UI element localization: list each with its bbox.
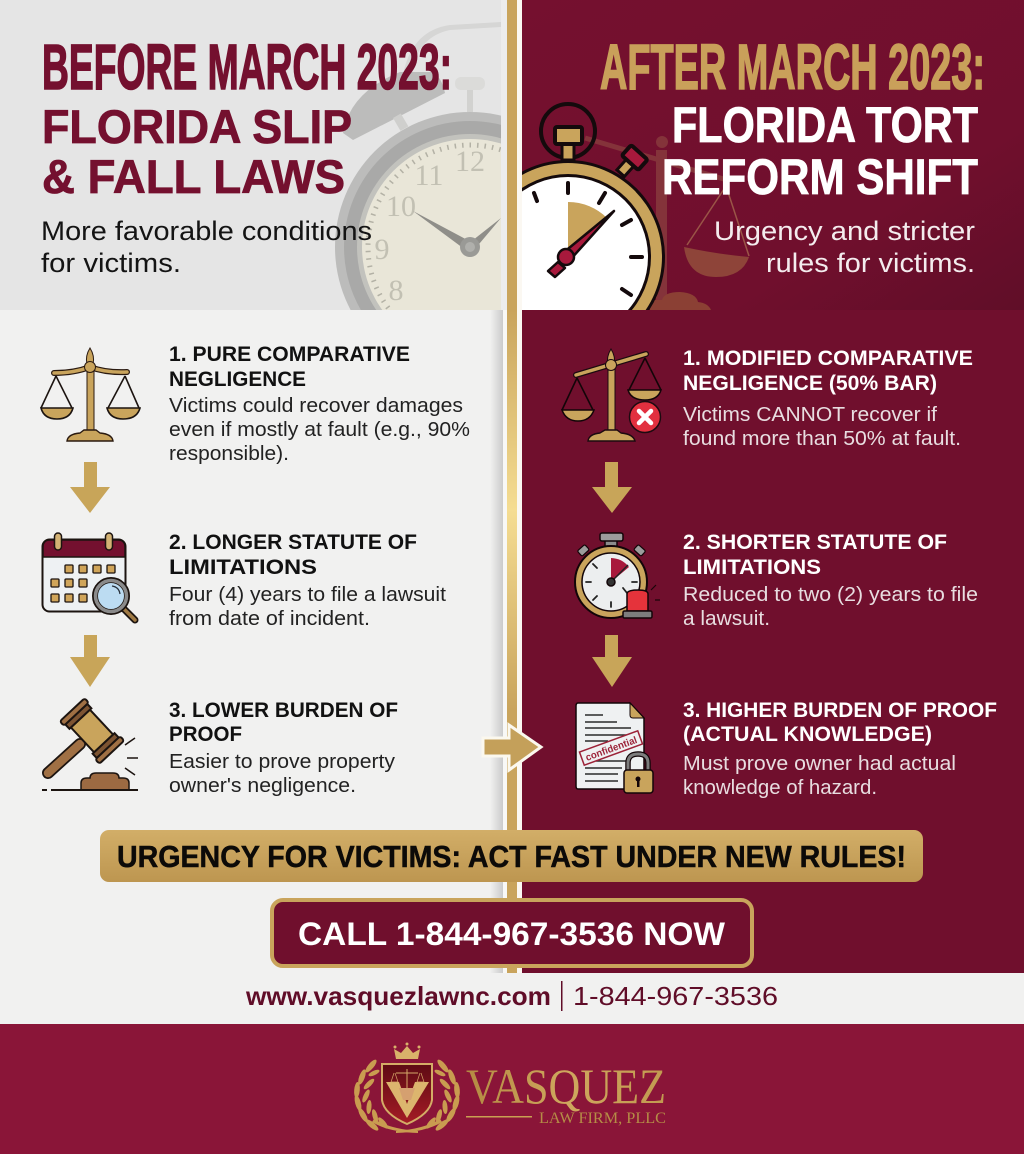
text: higher burden of proof: 3. HIGHER BURDEN OF PROOF (683, 699, 997, 722)
wordmark rule (466, 1116, 532, 1118)
icon: crown (394, 1042, 420, 1059)
text: shorter statute of limitations (683, 531, 978, 630)
icon: faded alarm clock: 12 (455, 145, 485, 178)
text: longer statute of limitations: from date of incident. (169, 608, 370, 630)
text: longer statute of limitations (169, 531, 446, 630)
icon: stopwatch (522, 102, 665, 310)
text: modified comparative negligence: 1. MODIFIED COMPARATIVE (683, 347, 973, 370)
heading: before march 2023: BEFORE MARCH 2023: (42, 31, 452, 103)
text: longer statute of limitations: Four (4) years to file a lawsuit (169, 584, 446, 606)
arrow: left down 1 (70, 462, 110, 513)
icon: stopwatch with siren (575, 533, 660, 618)
divider (501, 0, 522, 973)
text: shorter statute of limitations: a lawsuit. (683, 608, 770, 630)
heading: before march 2023 (42, 31, 452, 203)
icon: confidential document with lock (576, 703, 653, 793)
text: modified comparative negligence: Victims CANNOT recover if (683, 404, 937, 426)
text: modified comparative negligence: NEGLIGENCE (50% BAR) (683, 372, 937, 395)
icon: shield (382, 1064, 432, 1124)
text: modified comparative negligence: found more than 50% at fault. (683, 428, 961, 450)
icon: laurel wreath (353, 1058, 461, 1133)
icon: faded alarm clock: 8 (388, 274, 404, 307)
text: longer statute of limitations: 2. LONGER STATUTE OF (169, 531, 417, 554)
panel: bottom contact strip background (0, 973, 1024, 1024)
button: call now: CALL 1-844-967-3536 NOW (298, 916, 726, 952)
heading: before march 2023: & FALL LAWS (42, 150, 345, 203)
text: pure comparative negligence: 1. PURE COMPARATIVE (169, 343, 410, 366)
text: pure comparative negligence: even if mostly at fault (e.g., 90% (169, 419, 470, 441)
arrow: left down 2 (70, 635, 110, 687)
button: call now (272, 900, 752, 966)
icon: faded alarm clock: 9 (374, 233, 390, 266)
text: higher burden of proof: knowledge of hazard. (683, 777, 877, 799)
text: higher burden of proof: Must prove owner had actual (683, 753, 956, 775)
text: higher burden of proof: (ACTUAL KNOWLEDGE) (683, 723, 932, 746)
icon: faded alarm clock: 10 (386, 190, 416, 223)
panel: right background (522, 0, 1024, 973)
subtitle: left: for victims. (41, 248, 181, 278)
wordmark: VASQUEZ (466, 1058, 666, 1114)
arrow: center transition (483, 725, 541, 770)
text: website and phone: www.vasquezlawnc.com (245, 981, 551, 1011)
text: shorter statute of limitations: Reduced to two (2) years to file (683, 584, 978, 606)
text: website and phone: 1-844-967-3536 (573, 981, 778, 1011)
icon: faded scales behind right heading (585, 136, 749, 310)
text: lower burden of proof: 3. LOWER BURDEN OF (169, 699, 398, 722)
logo: vasquez law firm (353, 1042, 666, 1133)
text: lower burden of proof (169, 699, 398, 797)
text: pure comparative negligence: responsible). (169, 443, 289, 465)
subtitle: left (41, 216, 372, 278)
subtitle: right: Urgency and stricter (714, 216, 975, 246)
text: pure comparative negligence: NEGLIGENCE (169, 368, 306, 391)
text: pure comparative negligence: Victims could recover damages (169, 395, 463, 417)
panel: left background (0, 0, 507, 973)
subtitle: right (714, 216, 975, 278)
icon: balanced scales (41, 348, 140, 441)
icon: faded alarm clock: 11 (415, 159, 443, 192)
icon: calendar with magnifier (42, 533, 135, 620)
text: longer statute of limitations: LIMITATIONS (169, 556, 317, 579)
wordmark subtitle: LAW FIRM, PLLC (539, 1110, 666, 1127)
heading: after march 2023 (600, 31, 985, 205)
text: website and phone (245, 981, 778, 1011)
arrow: right down 2 (592, 635, 632, 687)
text: modified comparative negligence (683, 347, 973, 450)
icon: tilted scales with x badge (562, 349, 661, 441)
text: shorter statute of limitations: 2. SHORTER STATUTE OF (683, 531, 947, 554)
icon: gavel (42, 698, 138, 790)
heading: before march 2023: FLORIDA SLIP (42, 100, 352, 153)
subtitle: left: More favorable conditions (41, 216, 372, 246)
text: pure comparative negligence (169, 343, 470, 465)
callout: urgency banner: URGENCY FOR VICTIMS: ACT FAST UNDER NEW RULES! (117, 840, 906, 874)
icon: confidential document with lock: confidential (584, 735, 639, 764)
text: lower burden of proof: PROOF (169, 723, 242, 746)
subtitle: right: rules for victims. (766, 248, 975, 278)
text: higher burden of proof (683, 699, 997, 799)
footer band (0, 1024, 1024, 1154)
text: shorter statute of limitations: LIMITATIONS (683, 556, 821, 579)
text: lower burden of proof: Easier to prove property (169, 751, 395, 773)
callout: urgency banner (100, 830, 923, 882)
text: lower burden of proof: owner's negligence. (169, 775, 356, 797)
icon: faded alarm clock (335, 22, 501, 310)
arrow: right down 1 (592, 462, 632, 513)
